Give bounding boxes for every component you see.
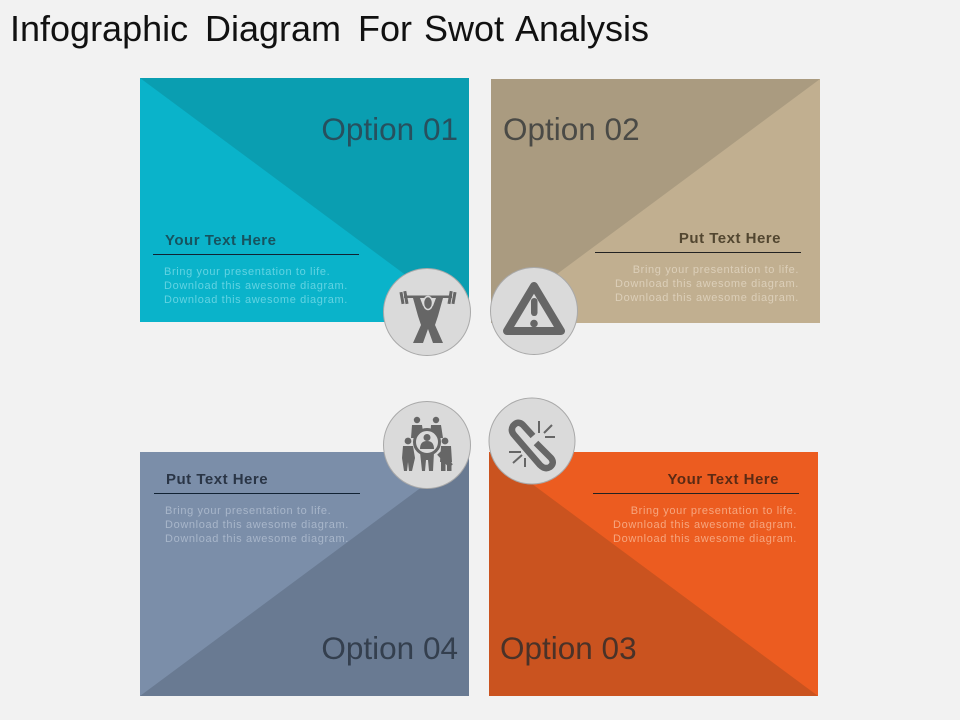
title: Swot: [424, 8, 504, 49]
option 01 body text: Download this awesome diagram.: [164, 294, 348, 306]
option 02 body text: Download this awesome diagram.: [615, 278, 799, 290]
option 04 body text: Bring your presentation to life.: [165, 505, 331, 517]
option 01 heading: Option 01: [321, 111, 458, 147]
option 04 body text: Download this awesome diagram.: [165, 519, 349, 531]
title: Diagram: [205, 8, 341, 49]
option 03 subheading: Your Text Here: [668, 471, 779, 488]
panel: option 02: [491, 79, 820, 323]
option 04 body text: Download this awesome diagram.: [165, 533, 349, 545]
icon: broken chain badge: [489, 398, 575, 484]
icon: weightlifter badge: [384, 268, 470, 356]
option 03 body text: Download this awesome diagram.: [613, 519, 797, 531]
title: [10, 8, 649, 49]
icon: warning triangle badge: [490, 268, 578, 354]
option 02 subheading: Put Text Here: [679, 230, 781, 247]
option 01 subheading: Your Text Here: [165, 232, 276, 249]
option 03 body text: Bring your presentation to life.: [631, 505, 797, 517]
option 04 subheading: Put Text Here: [166, 471, 268, 488]
panel: option 03: [489, 452, 818, 696]
title: For: [358, 8, 412, 49]
option 04 heading: Option 04: [321, 630, 458, 666]
option 03 heading: Option 03: [500, 630, 637, 666]
option 02 heading: Option 02: [503, 111, 640, 147]
panel: option 04: [140, 452, 469, 696]
option 03 body text: Download this awesome diagram.: [613, 533, 797, 545]
option 01 body text: Download this awesome diagram.: [164, 280, 348, 292]
option 01 body text: Bring your presentation to life.: [164, 266, 330, 278]
panel: option 01: [140, 78, 469, 322]
option 02 body text: Bring your presentation to life.: [633, 264, 799, 276]
title: Infographic: [10, 8, 188, 49]
title: Analysis: [515, 8, 649, 49]
icon: team search badge: [384, 402, 470, 488]
option 02 body text: Download this awesome diagram.: [615, 292, 799, 304]
